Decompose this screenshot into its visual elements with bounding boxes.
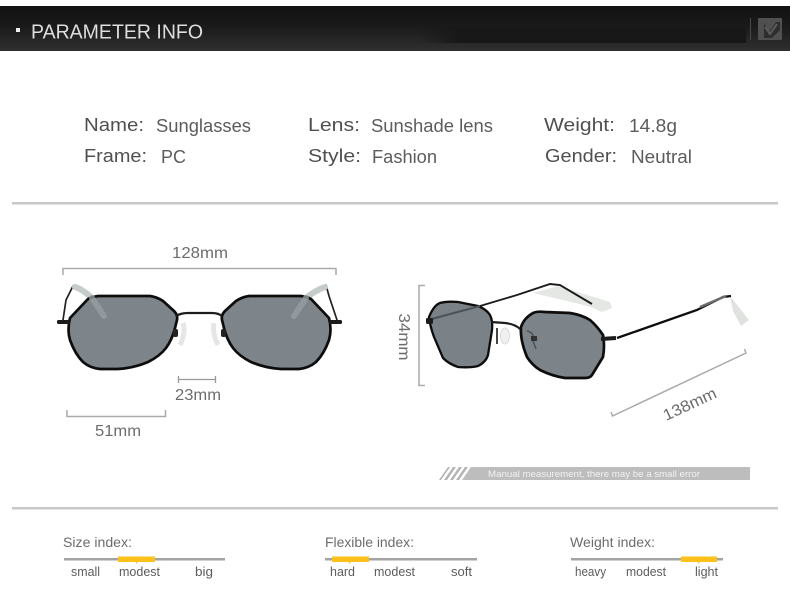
front view sunglasses	[57, 285, 342, 369]
index: weight: heavy	[575, 565, 607, 579]
parameter: name: Name:	[84, 114, 144, 135]
dimension: 128mm	[63, 245, 336, 275]
index: size: small	[71, 565, 100, 579]
left lens	[68, 296, 177, 369]
measurement note banner	[439, 467, 750, 480]
header logo	[750, 18, 782, 40]
header bullet	[16, 28, 20, 32]
index: size: big	[195, 565, 213, 579]
measurement note banner: Manual measurement, there may be a small error	[488, 469, 700, 480]
flexible marker	[332, 556, 369, 564]
dimension: 23mm: 23mm	[175, 387, 221, 404]
parameter: gender: Neutral	[631, 147, 692, 167]
parameter: weight	[544, 114, 677, 136]
hinges	[426, 318, 433, 324]
parameter: gender: Gender:	[545, 145, 617, 166]
index: weight: modest	[626, 565, 667, 579]
header title: PARAMETER INFO	[31, 20, 203, 44]
parameter: frame: Frame:	[84, 145, 147, 166]
far temple	[480, 284, 612, 312]
temple tips seen through lenses	[92, 298, 104, 316]
parameter list	[84, 114, 692, 167]
parameter: gender	[545, 145, 692, 167]
nose pads	[180, 323, 184, 345]
index: weight	[570, 535, 723, 579]
index: flexible: Flexible index:	[325, 535, 414, 550]
parameter: name	[84, 114, 251, 136]
dimension: 51mm: 51mm	[95, 423, 141, 440]
parameter: style: Style:	[308, 145, 361, 166]
parameter: name: Sunglasses	[156, 116, 251, 136]
dimension: 23mm	[175, 376, 221, 404]
bridge	[491, 322, 520, 329]
index: weight: Weight index:	[570, 535, 655, 550]
near lens	[521, 312, 604, 378]
dimension: 128mm: 128mm	[172, 245, 228, 262]
parameter: lens: Sunshade lens	[371, 116, 493, 136]
size marker	[118, 556, 155, 564]
index: weight: light	[695, 565, 719, 579]
parameter: lens	[308, 114, 493, 136]
parameter: lens: Lens:	[308, 114, 360, 135]
temples behind lenses	[63, 285, 337, 320]
index: flexible	[325, 535, 477, 579]
dimension: 34mm	[395, 286, 425, 386]
temple across far lens	[428, 306, 480, 320]
side view sunglasses	[426, 284, 749, 378]
index: size: modest	[119, 565, 161, 579]
dimension: 51mm	[67, 410, 166, 440]
index: flexible: modest	[374, 565, 416, 579]
parameter: frame	[84, 145, 186, 167]
bridge	[176, 313, 222, 316]
index: size	[63, 535, 225, 579]
parameter: weight: 14.8g	[629, 116, 677, 136]
weight marker	[681, 556, 717, 564]
right lens	[222, 296, 330, 369]
nose pads	[496, 328, 498, 344]
far lens	[429, 302, 492, 367]
parameter: weight: Weight:	[544, 114, 615, 135]
hinges	[57, 320, 70, 324]
near temple	[617, 296, 749, 338]
dimension: 138mm	[611, 349, 746, 425]
index: size: Size index:	[63, 535, 132, 550]
parameter: style: Fashion	[372, 147, 437, 167]
index: flexible: soft	[451, 565, 473, 579]
index: flexible: hard	[330, 565, 355, 579]
dimension: 138mm: 138mm	[661, 385, 720, 425]
dimension: 34mm: 34mm	[395, 314, 412, 360]
header bar	[0, 6, 790, 51]
parameter: style	[308, 145, 437, 167]
parameter: frame: PC	[161, 147, 186, 167]
